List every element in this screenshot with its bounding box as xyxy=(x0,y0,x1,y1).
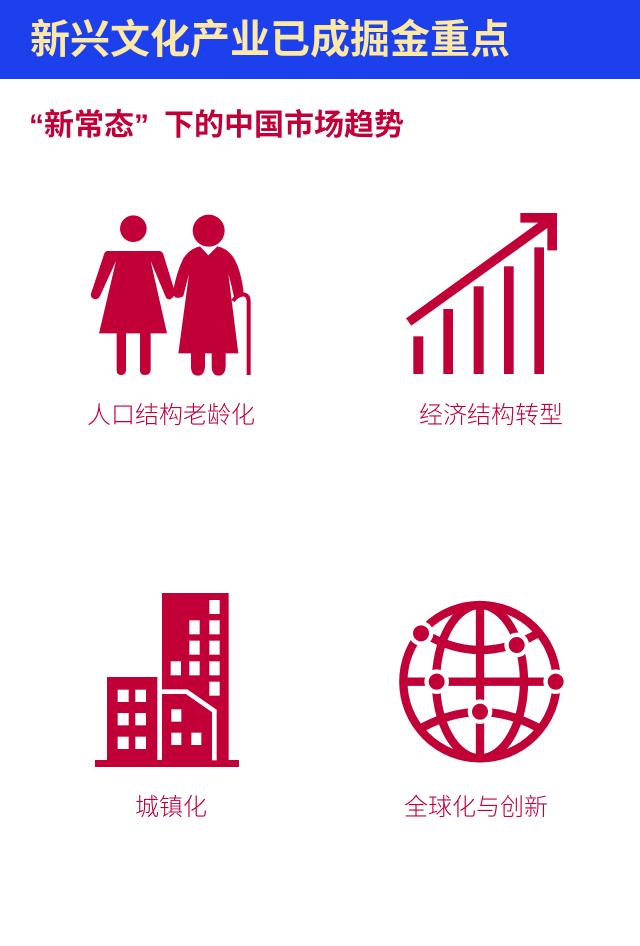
icon: globe network xyxy=(399,600,564,762)
label: 城镇化 xyxy=(135,794,207,821)
panel: economic restructuring xyxy=(406,213,563,429)
header banner xyxy=(0,0,640,79)
panel: ageing population xyxy=(87,214,255,429)
panel: urbanisation xyxy=(95,593,239,821)
icon: rising bars and arrow xyxy=(406,213,557,374)
label: 经济结构转型 xyxy=(419,402,563,429)
subtitle: “新常态” 下的中国市场趋势 xyxy=(29,109,404,142)
label: 全球化与创新 xyxy=(404,794,548,821)
icon: couple figures xyxy=(90,214,251,376)
title: 新兴文化产业已成掘金重点 xyxy=(30,18,510,62)
icon: city buildings xyxy=(95,593,239,767)
panel: globalisation and innovation xyxy=(399,600,564,821)
label: 人口结构老龄化 xyxy=(87,402,255,429)
